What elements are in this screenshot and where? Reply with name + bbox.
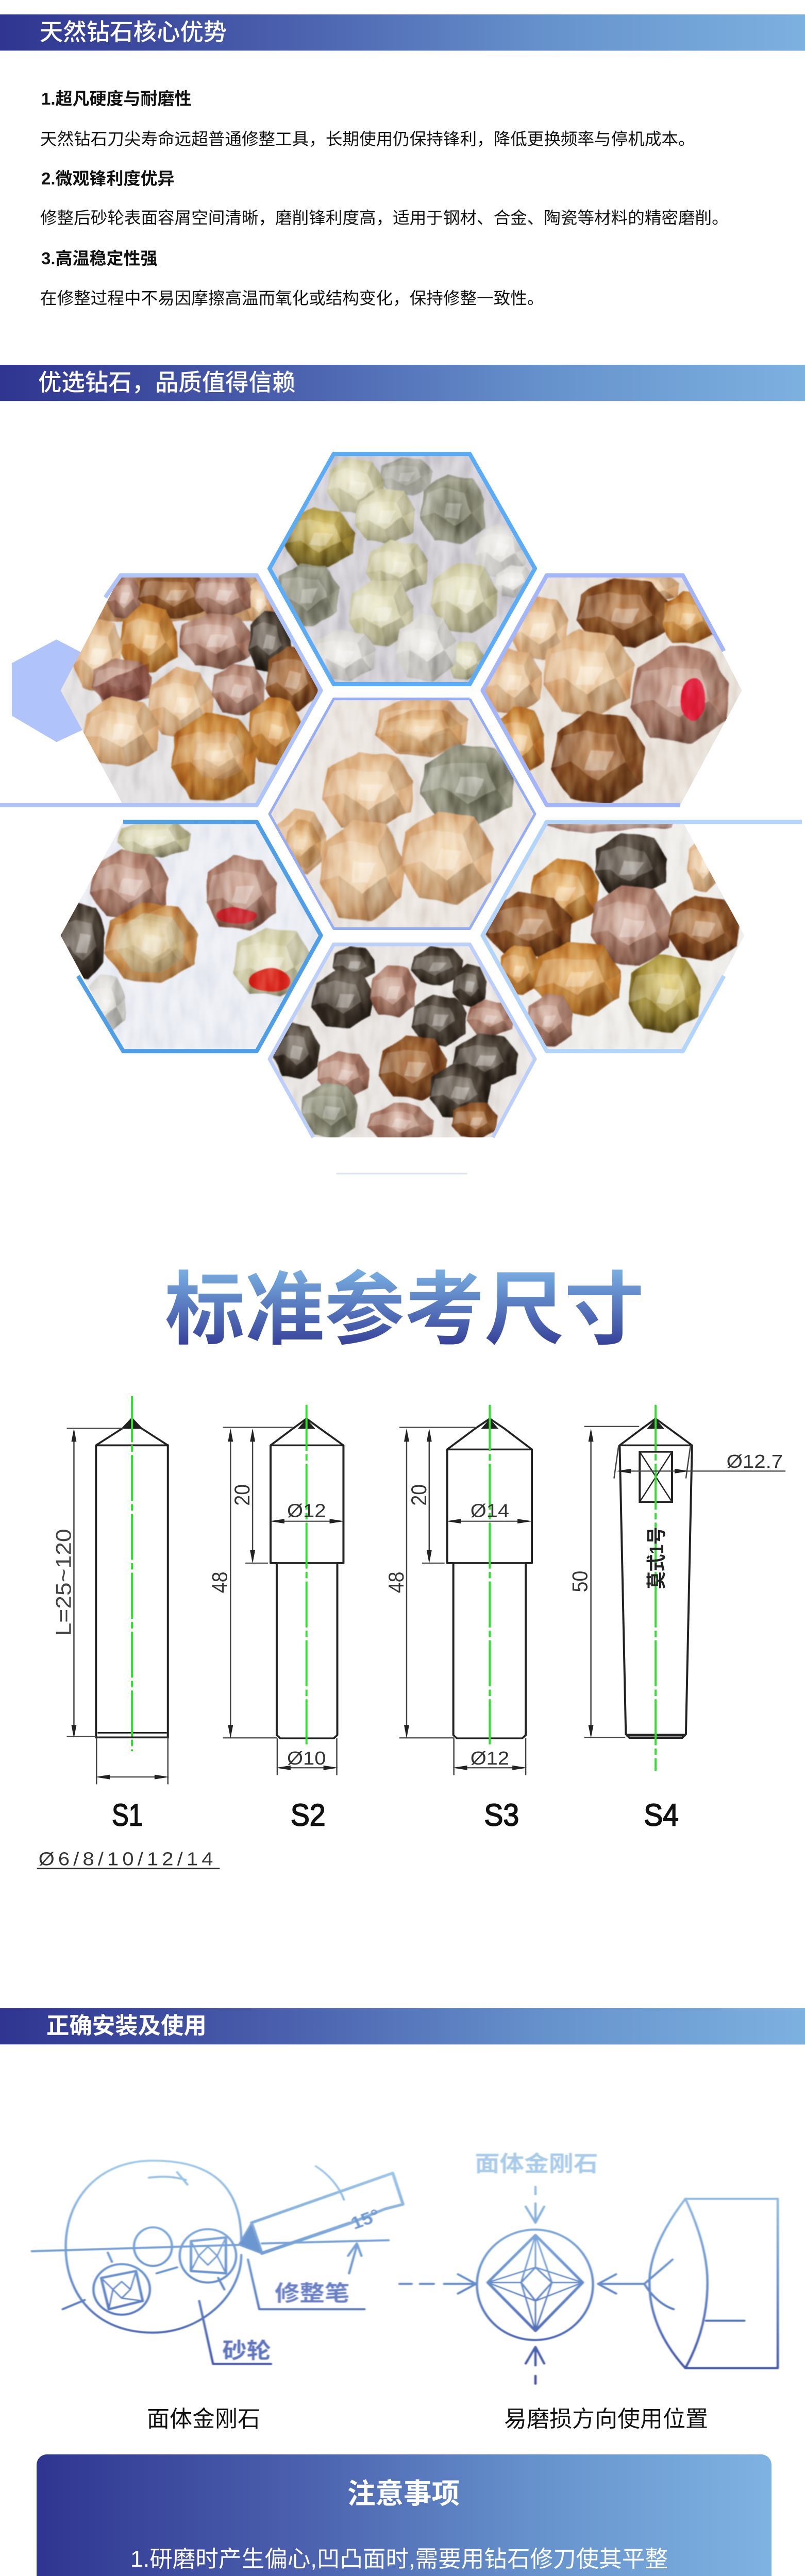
drawing: S4: 50 — [568, 1571, 592, 1592]
drawing: S3: Ø14 — [471, 1501, 509, 1521]
panel heading: 注意事项 — [347, 2478, 460, 2510]
drawing: S2: Ø10 — [287, 1749, 326, 1769]
drawing: S3: Ø12 — [471, 1749, 509, 1769]
drawing: S3: 20 — [407, 1484, 431, 1506]
diagram label: 15 degree angle: 15° — [347, 2205, 383, 2233]
diagram label: face diamond: 面体金刚石 — [475, 2151, 598, 2176]
drawing: S1: L=25~120 — [52, 1529, 76, 1636]
hexagon: right upper, brown diamonds — [469, 563, 757, 821]
drawing: S3: 48 — [384, 1572, 408, 1593]
advantage 2 body: 修整后砂轮表面容屑空间清晰，磨削锋利度高，适用于钢材、合金、陶瓷等材料的精密磨削。 — [40, 208, 729, 227]
hexagon: bottom, dark diamonds — [268, 943, 537, 1175]
advantage 1 body: 天然钻石刀尖寿命远超普通修整工具，长期使用仍保持锋利，降低更换频率与停机成本。 — [40, 129, 695, 148]
diagram label: dressing pen: 修整笔 — [275, 2281, 349, 2306]
panel: precautions — [37, 2454, 772, 2576]
diagram: grinding wheel and dressing pen — [32, 2161, 403, 2364]
diagram label: grinding wheel: 砂轮 — [222, 2338, 271, 2363]
installation diagram — [30, 2151, 780, 2385]
hexagon: left upper, amber diamonds — [0, 573, 323, 807]
advantage 2 heading: 2.微观锋利度优异 — [41, 169, 175, 188]
diagram: diamond in holder with force arrows — [399, 2187, 778, 2384]
drawing: S2: 48 — [208, 1572, 232, 1593]
section header: core advantages — [0, 14, 805, 50]
hexagon photo collage of rough diamonds — [0, 452, 802, 1175]
dimension drawings S1 to S4 — [37, 1396, 785, 1870]
section header: correct installation and use — [0, 2008, 805, 2044]
drawing: S4: 莫式1号 — [645, 1527, 667, 1589]
hexagon: top, pale diamonds — [267, 452, 537, 686]
hexagon: left lower, red-marked diamonds — [61, 820, 323, 1053]
heading: selected diamonds: 优选钻石，品质值得信赖 — [38, 369, 295, 396]
caption: face diamond: 面体金刚石 — [147, 2406, 260, 2432]
drawing: S2 — [208, 1405, 344, 1775]
drawing: S4: Ø12.7 — [727, 1452, 783, 1472]
drawing: S2: 20 — [230, 1484, 255, 1506]
label: S1: S1 — [112, 1798, 143, 1833]
caption: wear direction position: 易磨损方向使用位置 — [504, 2406, 708, 2432]
hexagon: centre, peach diamonds — [268, 698, 536, 930]
drawing: S1 — [52, 1396, 170, 1784]
label: S4: S4 — [644, 1798, 679, 1833]
icon: small pale blue hexagon — [12, 639, 85, 742]
drawing: S2: Ø12 — [287, 1501, 326, 1521]
advantage 3 heading: 3.高温稳定性强 — [41, 249, 158, 268]
heading: correct installation and use: 正确安装及使用 — [46, 2013, 207, 2039]
note: S1 diameter options: Ø6/8/10/12/14 — [39, 1849, 213, 1870]
section header: selected diamonds — [0, 365, 805, 401]
drawing: S3 — [384, 1405, 532, 1775]
precaution 1: 1.研磨时产生偏心,凹凸面时,需要用钻石修刀使其平整 — [130, 2547, 668, 2572]
label: S3: S3 — [484, 1798, 519, 1833]
label: S2: S2 — [291, 1798, 326, 1833]
heading: standard reference dimensions: 标准参考尺寸 — [165, 1265, 644, 1354]
drawing: S4 — [568, 1405, 785, 1771]
advantage 3 body: 在修整过程中不易因摩擦高温而氧化或结构变化，保持修整一致性。 — [40, 289, 544, 308]
text block: advantages list — [40, 89, 729, 308]
advantage 1 heading: 1.超凡硬度与耐磨性 — [41, 89, 192, 108]
hexagon: right lower, golden diamonds — [469, 808, 802, 1065]
heading: core advantages: 天然钻石核心优势 — [40, 19, 227, 45]
